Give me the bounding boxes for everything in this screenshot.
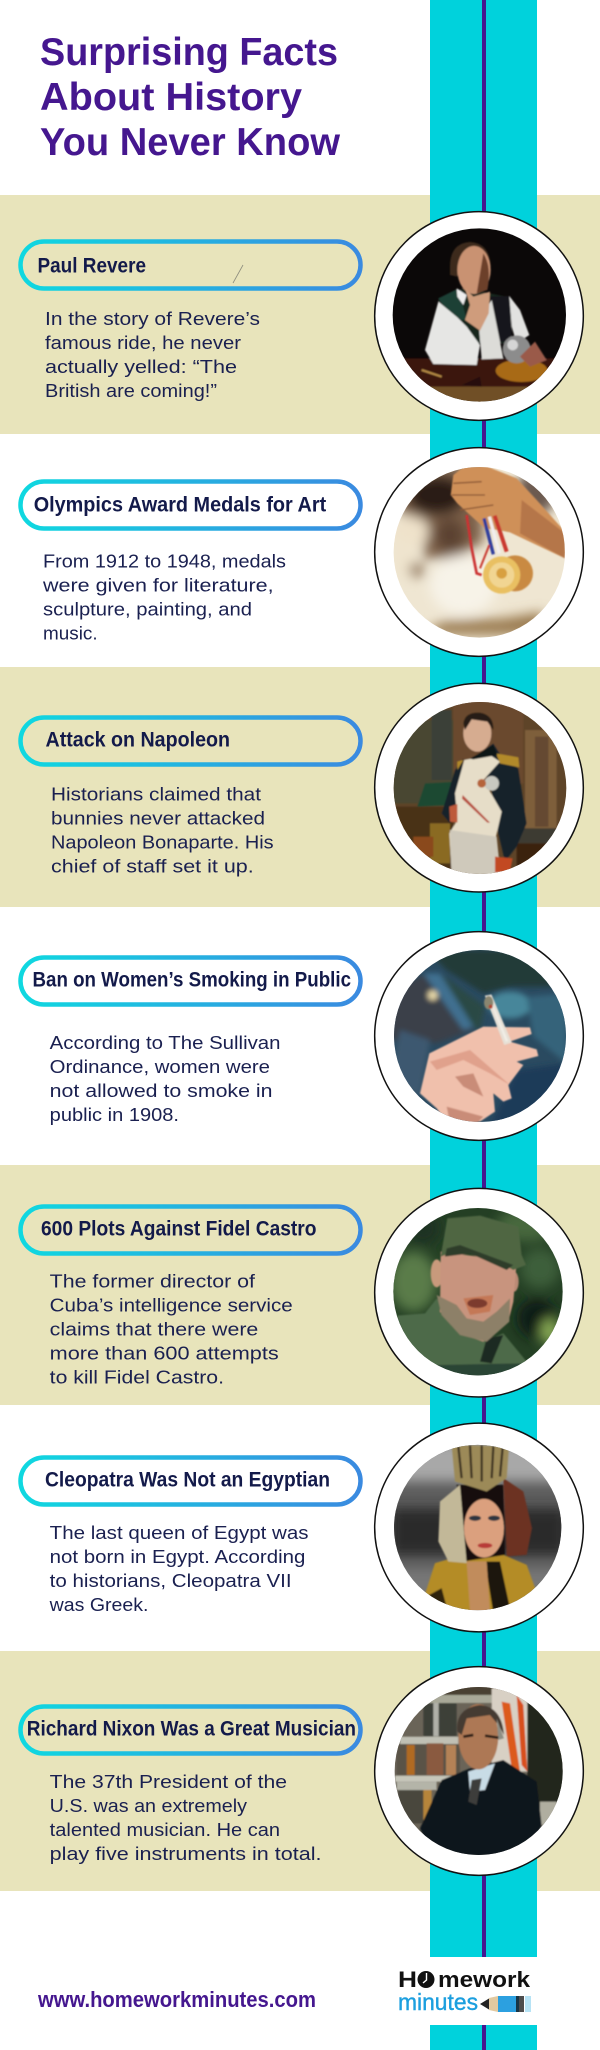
text: Nixon: talented musician. He can [50,1819,280,1840]
heading pill: Castro: 600 Plots Against Fidel Castro [41,1218,316,1241]
title [40,31,341,164]
central stripe [430,0,537,2050]
photo: Napoleon portrait [375,683,583,892]
text: Nixon: play five instruments in total. [50,1843,321,1864]
heading pill: Nixon [20,1706,360,1754]
text: Cleopatra: The last queen of Egypt was [50,1522,308,1543]
text: Castro: Cuba’s intelligence service [50,1295,293,1316]
logo: Homework Minutes: minutes [398,1989,478,2015]
heading pill: Napoleon: Attack on Napoleon [46,729,230,752]
footer URL: www.homeworkminutes.com [37,1987,316,2012]
photo: Cleopatra doll [375,1423,583,1632]
text: smoking: Ordinance, women were [50,1056,270,1077]
text: Napoleon [51,784,274,877]
text: Castro: to kill Fidel Castro. [50,1367,224,1388]
text: Paul Revere: famous ride, he never [45,332,241,353]
panel: Paul Revere [0,195,600,434]
text: Paul Revere: British are coming!” [45,380,217,401]
logo: Homework Minutes: H [398,1967,417,1992]
photo: Richard Nixon portrait [375,1667,583,1875]
text: Castro: more than 600 attempts [50,1343,279,1364]
text: smoking: public in 1908. [50,1104,179,1125]
photo: Paul Revere portrait [375,212,583,420]
logo: Homework Minutes [398,1967,531,2015]
text: Castro: The former director of [50,1271,256,1292]
panel: Olympics Award Medals for Art [18,446,584,658]
text: Cleopatra: was Greek. [49,1594,148,1615]
text: Napoleon: Historians claimed that [51,784,261,805]
heading pill: smoking: Ban on Women’s Smoking in Public [32,969,351,992]
text: Olympics: sculpture, painting, and [43,599,252,620]
text: Paul Revere: In the story of Revere’s [45,308,260,329]
heading pill: Nixon: Richard Nixon Was a Great Musician [27,1718,356,1741]
text: Olympics: were given for literature, [42,575,274,596]
panel: Cleopatra Was Not an Egyptian [18,1422,584,1633]
text: Napoleon: Napoleon Bonaparte. His [51,832,274,853]
text: smoking: According to The Sullivan [50,1032,281,1053]
text: Olympics [42,551,286,644]
text: Olympics: From 1912 to 1948, medals [43,551,286,572]
title: Surprising Facts [40,31,338,74]
text: Nixon: The 37th President of the [50,1771,287,1792]
text: Paul Revere: actually yelled: “The [45,356,237,377]
text: Cleopatra: to historians, Cleopatra VII [50,1570,292,1591]
panel: 600 Plots Against Fidel Castro [0,1165,600,1405]
photo: hand holding cigarette [375,932,583,1140]
text: smoking [50,1032,281,1125]
heading pill: smoking [20,958,360,1004]
heading pill: Paul Revere: Paul Revere [38,254,146,278]
panel: Attack on Napoleon [0,667,600,907]
text: Castro [50,1271,293,1388]
text: Nixon [50,1771,321,1864]
text: Olympics: music. [43,623,98,644]
text: Nixon: U.S. was an extremely [50,1795,248,1816]
heading pill: Cleopatra: Cleopatra Was Not an Egyptian [45,1469,330,1492]
panel: Ban on Women's Smoking in Public [18,930,584,1142]
heading pill: Castro [20,1206,360,1254]
text: Castro: claims that there were [50,1319,258,1340]
text: Paul Revere [45,308,260,401]
panel: Richard Nixon Was a Great Musician [0,1651,600,1891]
icon: pencil [480,1996,531,2012]
heading pill: Paul Revere [20,242,360,288]
heading pill: Napoleon [20,718,360,764]
text: Napoleon: chief of staff set it up. [51,856,254,877]
icon: clock letter o [418,1971,434,1988]
title: About History [40,76,302,119]
text: Napoleon: bunnies never attacked [51,808,265,829]
heading pill: Olympics: Olympics Award Medals for Art [34,494,326,517]
heading pill: Olympics [20,482,360,528]
text: Cleopatra: not born in Egypt. According [50,1546,305,1567]
photo: Fidel Castro portrait [375,1188,583,1397]
logo: Homework Minutes: mework [438,1967,531,1992]
text: smoking: not allowed to smoke in [50,1080,273,1101]
heading pill: Cleopatra [20,1458,360,1504]
photo: hand holding gold medals [375,448,583,656]
text: Cleopatra [49,1522,309,1615]
title: You Never Know [40,121,341,164]
